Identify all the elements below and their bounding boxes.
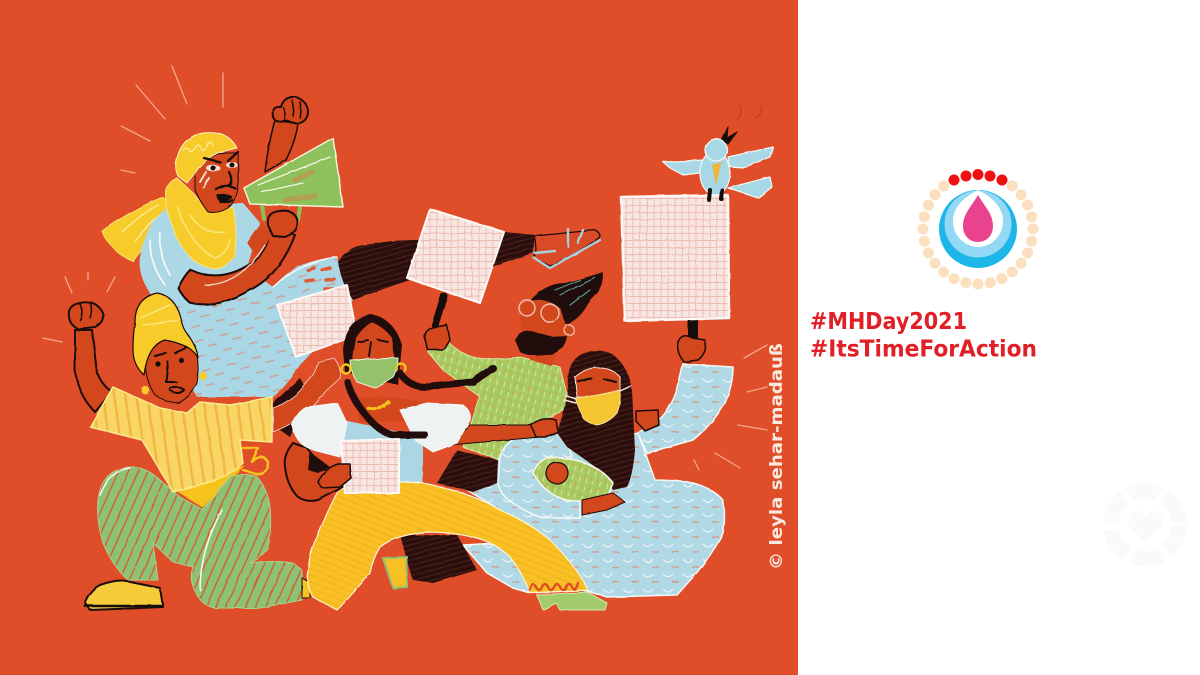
person: woman with hijab (450, 350, 659, 518)
right hand (636, 410, 659, 431)
blue dress (140, 203, 353, 397)
glasses (519, 300, 559, 322)
hijab (557, 350, 635, 490)
hashtag 2: #ItsTimeForAction (810, 336, 1037, 362)
person: woman with megaphone (102, 97, 353, 397)
dark leg and sandal (338, 229, 600, 300)
sign 3 pole (688, 320, 698, 345)
blue circle (939, 190, 1017, 268)
red dots (948, 169, 1008, 186)
beak (722, 127, 737, 144)
wings (663, 160, 705, 175)
megaphone (244, 138, 343, 220)
watermark logo (1111, 491, 1179, 559)
yellow underlayer (175, 465, 245, 508)
raised forearm (273, 358, 340, 432)
white drop (953, 190, 1003, 247)
earrings (342, 364, 406, 374)
hashtags (810, 309, 1037, 362)
arm sleeve around baby (498, 433, 580, 518)
hair (530, 272, 603, 325)
blouse (90, 387, 272, 492)
pants hem wave (530, 583, 578, 590)
note sign (341, 439, 399, 493)
neck (530, 350, 557, 366)
chest (353, 397, 427, 422)
cuff (302, 578, 310, 598)
raised fist (69, 302, 103, 329)
blue top (343, 420, 423, 493)
left hand (531, 419, 558, 437)
yellow mask (575, 390, 620, 425)
raised fist (273, 97, 308, 123)
green mask (350, 358, 398, 388)
raised arm sleeve (273, 378, 310, 437)
sweater (428, 342, 570, 460)
baby face (546, 462, 568, 484)
bird (663, 104, 773, 200)
hand on pole (424, 325, 450, 350)
raised arm (75, 330, 112, 412)
lower arm (178, 225, 295, 305)
skirt (463, 433, 724, 597)
raised hand (678, 336, 706, 362)
hair (343, 314, 402, 385)
body (700, 151, 730, 195)
sign 2 pole (435, 296, 444, 325)
raised arm (265, 120, 298, 172)
megaphone fist (268, 211, 297, 237)
person: woman with braids and green mask (273, 314, 607, 610)
hand on note (318, 464, 351, 488)
face (520, 299, 572, 352)
peach dot ring (918, 180, 1038, 290)
sign 1 (277, 285, 357, 357)
legs (709, 190, 722, 200)
cradling hand (582, 493, 625, 515)
beard (515, 331, 567, 356)
artist credit: © leyla sehar-madauß (767, 343, 787, 570)
dress upper panel (140, 203, 260, 300)
facial features (200, 152, 238, 203)
turban (133, 293, 198, 375)
face (352, 322, 395, 362)
logo: menstrual cycle drop (918, 169, 1038, 290)
dark trousers (437, 450, 498, 492)
green shoe (537, 592, 607, 610)
pink drop (963, 195, 993, 242)
dark leg (338, 232, 535, 300)
green pants (98, 467, 302, 608)
back foot (383, 557, 407, 588)
braids (348, 383, 425, 435)
face (575, 368, 620, 397)
person: woman with turban (69, 293, 310, 610)
pant highlights (100, 468, 222, 590)
emphasis rays (43, 66, 767, 470)
sandal foot (534, 230, 600, 266)
left blouse (292, 403, 347, 457)
person: woman in blue with baby (463, 320, 733, 597)
illustration: protesters (69, 97, 773, 610)
right blouse (400, 403, 470, 452)
orange background panel (0, 0, 798, 675)
lower arm (285, 443, 343, 501)
hashtag 1: #MHDay2021 (810, 309, 967, 335)
light blue crescent (944, 190, 1012, 258)
tail (728, 177, 772, 198)
earrings (141, 386, 149, 394)
person: bearded man (424, 272, 603, 492)
raised sleeve (638, 364, 733, 453)
headscarf (176, 133, 237, 183)
scarf tail (102, 197, 172, 261)
shoe (85, 581, 163, 610)
dark knee (400, 535, 477, 583)
yellow pants (307, 482, 588, 610)
ear (564, 325, 574, 335)
dress hem dots (306, 268, 334, 289)
necklace (368, 400, 390, 408)
sign 2 (407, 209, 504, 303)
belly arm (450, 425, 545, 445)
sash bow (243, 448, 268, 474)
baby wrap (533, 457, 613, 501)
face (195, 153, 239, 212)
sign 3 (621, 195, 729, 321)
face (145, 340, 198, 403)
neck scarf (165, 178, 236, 269)
